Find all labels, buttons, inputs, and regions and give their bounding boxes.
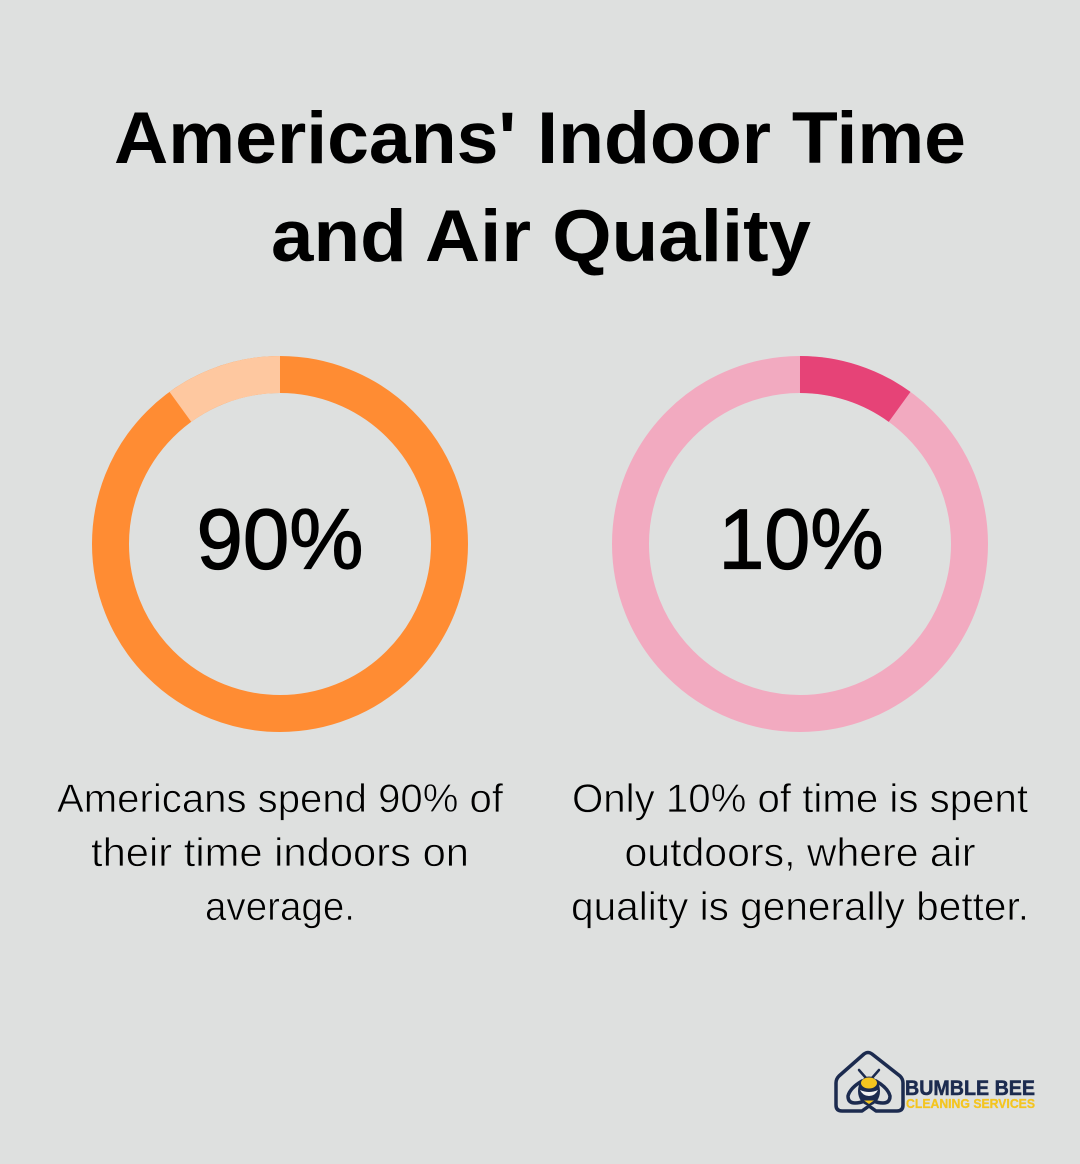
panel: indoors bbox=[57, 374, 504, 929]
title bbox=[114, 98, 966, 277]
description: outdoors: Only 10% of time is spent bbox=[572, 777, 1028, 821]
tagline: CLEANING SERVICES bbox=[906, 1096, 1035, 1111]
wordmark: BUMBLE BEE bbox=[905, 1077, 1035, 1100]
title: Americans' Indoor Time bbox=[114, 98, 966, 179]
description: indoors: their time indoors on bbox=[91, 831, 469, 875]
description: outdoors: outdoors, where air bbox=[624, 831, 976, 875]
value: 90%: 90% bbox=[196, 492, 364, 588]
logo: Bumble Bee Cleaning Services bbox=[836, 1052, 1035, 1111]
description: outdoors bbox=[571, 777, 1029, 929]
title: and Air Quality bbox=[271, 196, 811, 277]
icon: house with bee bbox=[836, 1052, 903, 1111]
value: 10%: 10% bbox=[718, 492, 884, 588]
donut chart: 90% bbox=[110, 374, 450, 714]
description: indoors: Americans spend 90% of bbox=[57, 777, 504, 821]
description: indoors: average. bbox=[205, 885, 355, 929]
description: indoors bbox=[57, 777, 504, 929]
panel: outdoors bbox=[571, 374, 1029, 929]
donut chart: 10% bbox=[630, 374, 970, 714]
description: outdoors: quality is generally better. bbox=[571, 885, 1029, 929]
